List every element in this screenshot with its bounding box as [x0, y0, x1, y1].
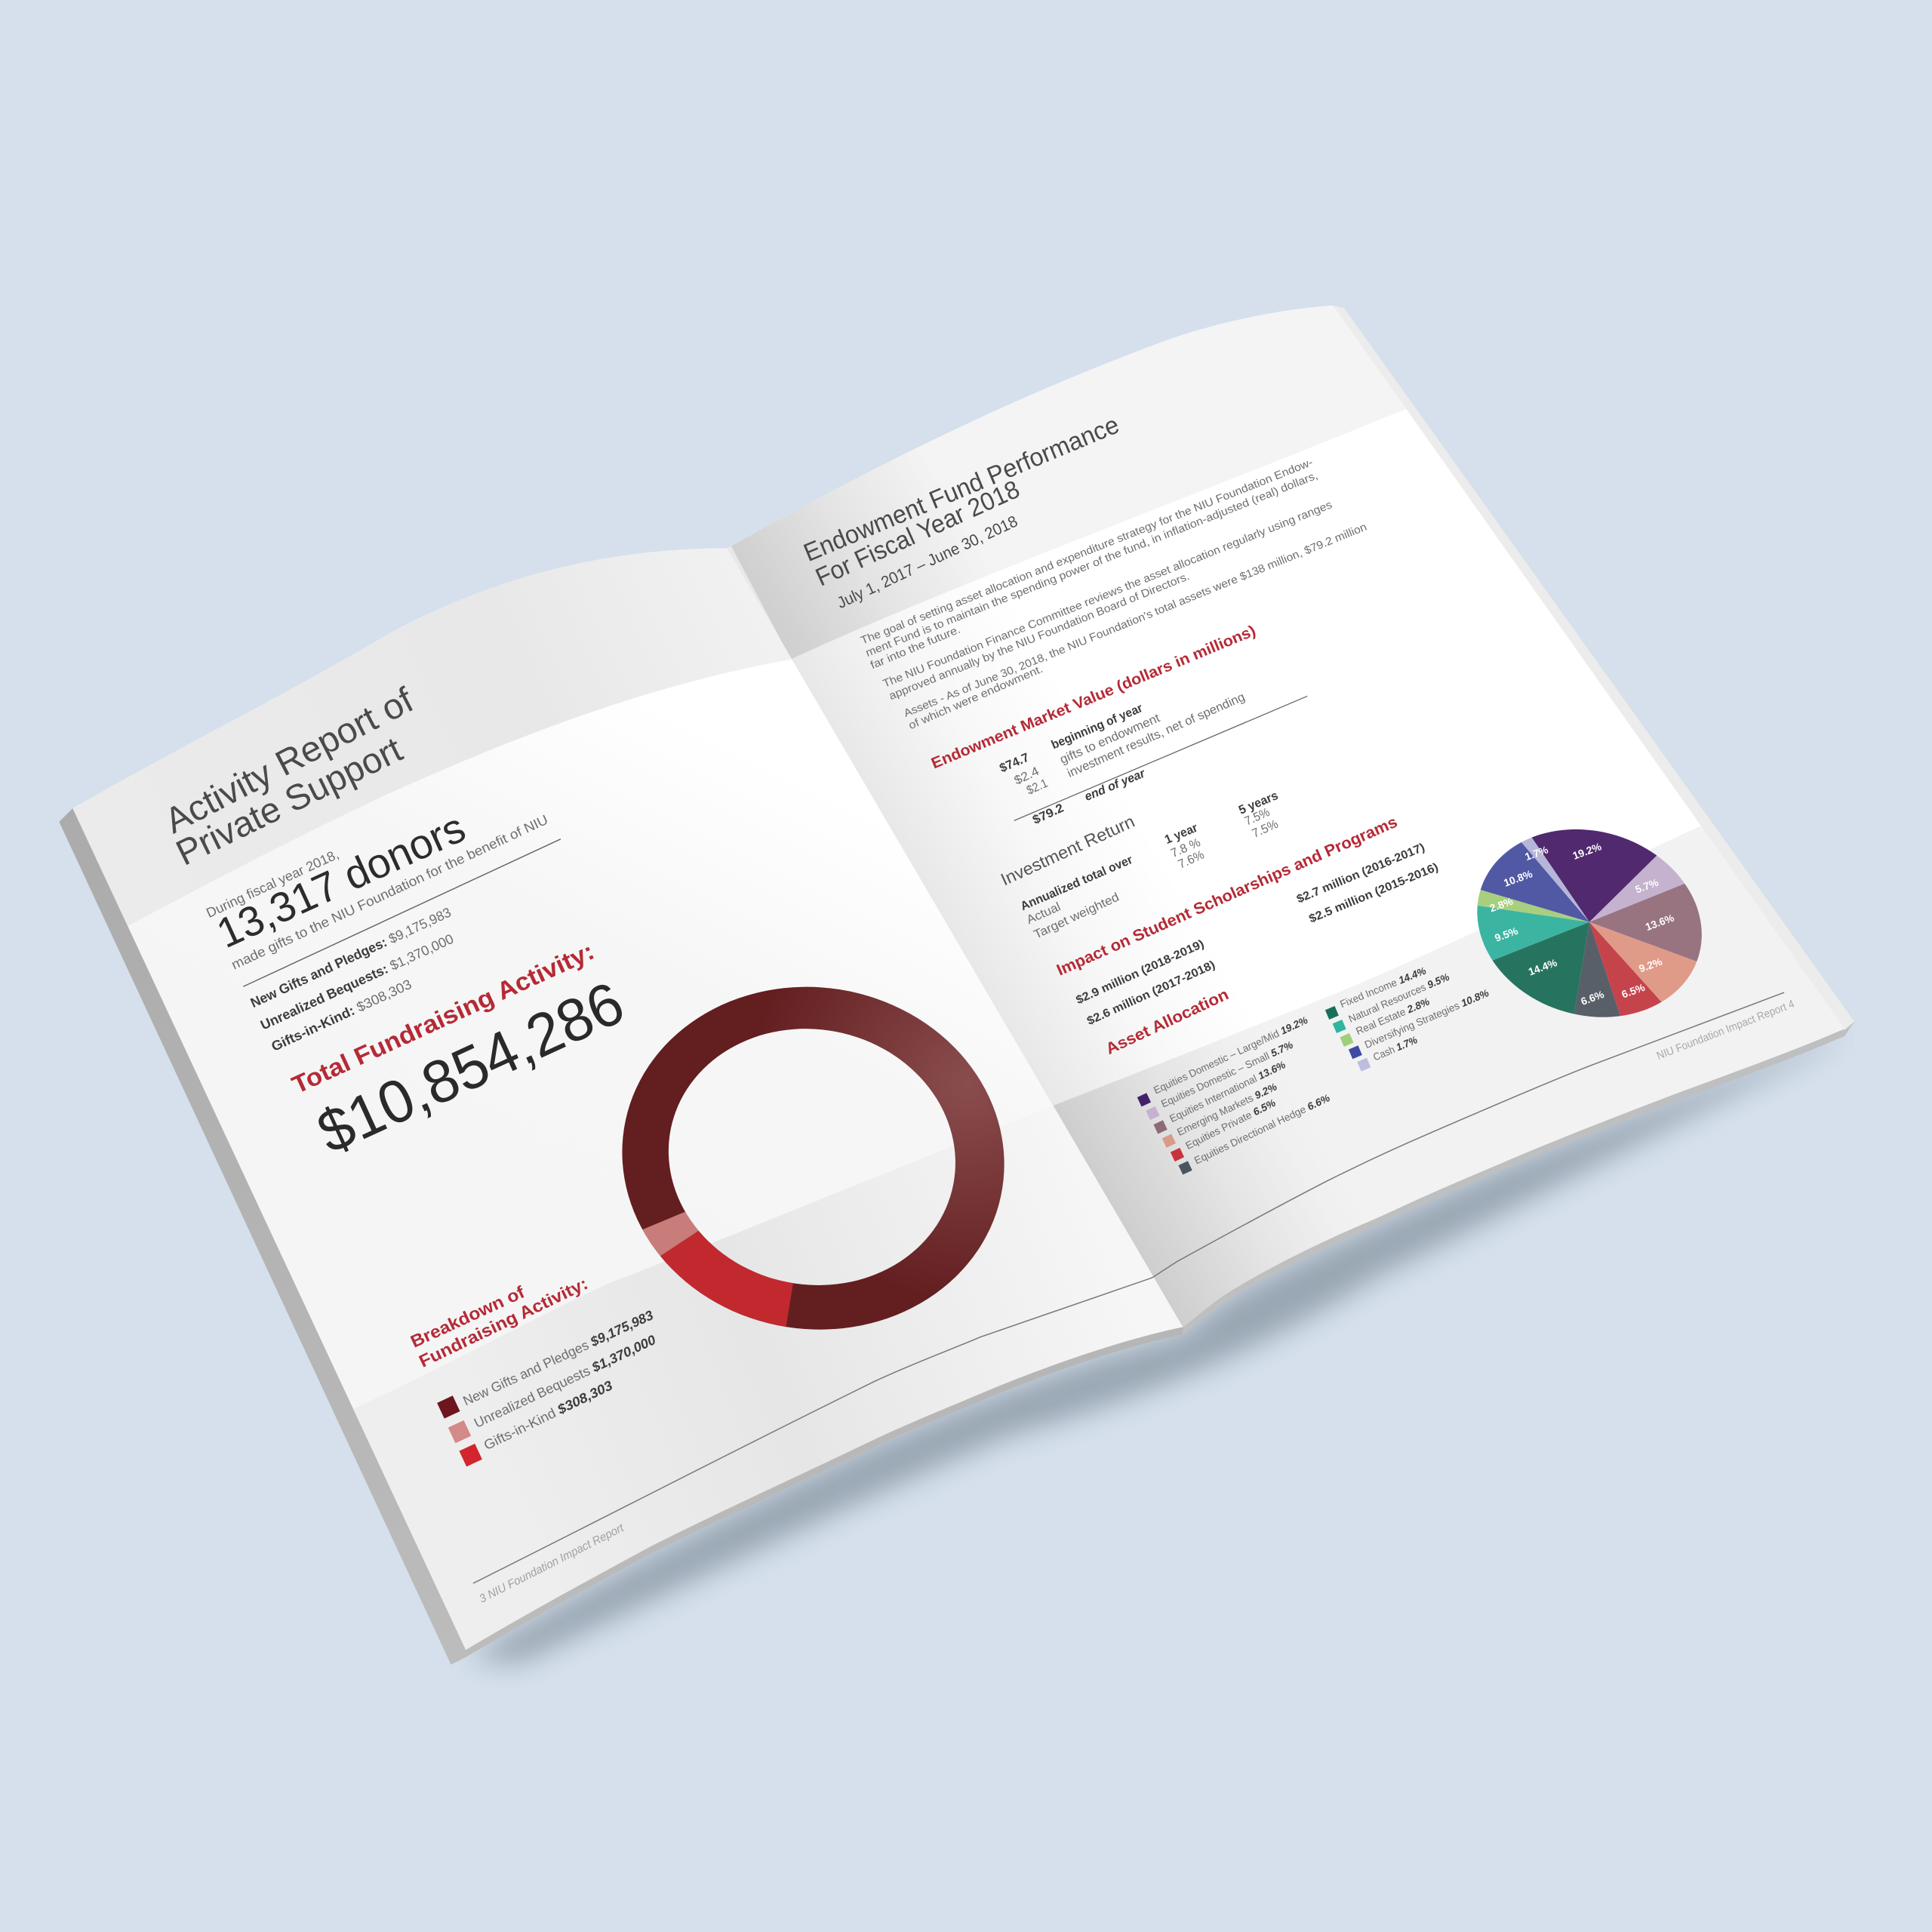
- impact values: $2.5 million (2015-2016): [1307, 861, 1440, 926]
- legend: new gifts: New Gifts and Pledges $9,175,983: [460, 1307, 656, 1408]
- date range: July 1, 2017 – June 30, 2018: [835, 512, 1020, 612]
- bequests: Unrealized Bequests: $1,370,000: [258, 931, 456, 1033]
- labels: Natural Resources 9.5%: [1347, 971, 1451, 1025]
- pie labels: [1488, 840, 1675, 1008]
- heading line 1: Endowment Fund Performance: [800, 411, 1123, 568]
- asset legend column 1: [1137, 1014, 1332, 1175]
- right page stack edge: [1183, 306, 1854, 1334]
- total amount: $10,854,286: [308, 969, 633, 1166]
- paragraph 1: The goal of setting asset allocation and expenditure strategy for the NIU Foundation Endow-: [859, 457, 1315, 648]
- breakdown line 1: Breakdown of: [408, 1281, 528, 1352]
- pie labels: 6.6%: [1579, 988, 1606, 1008]
- paragraph 1: ment Fund is to maintain the spending power of the fund, in inflation-adjusted (real) dollars,: [864, 469, 1319, 660]
- labels: Emerging Markets 9.2%: [1175, 1081, 1278, 1138]
- labels: Equities International 13.6%: [1168, 1059, 1287, 1124]
- legend: in kind: Gifts-in-Kind $308,303: [481, 1378, 615, 1453]
- swatches: [1325, 1006, 1371, 1072]
- heading line 1: Activity Report of: [158, 680, 420, 841]
- labels: Equities Directional Hedge 6.6%: [1192, 1092, 1332, 1167]
- labels: [1152, 1014, 1332, 1167]
- heading line 2: For Fiscal Year 2018: [811, 475, 1024, 592]
- row labels: Annualized total over: [1019, 853, 1135, 913]
- market value heading: Endowment Market Value (dollars in millions): [929, 623, 1258, 772]
- investment return table: 7.6%: [1176, 848, 1206, 872]
- donut: new gifts and pledges: [622, 987, 1004, 1330]
- right page footer: NIU Foundation Impact Report 4: [1655, 998, 1796, 1063]
- pie labels: 19.2%: [1571, 840, 1603, 862]
- pie chart: [1477, 829, 1702, 1017]
- value 79.2: $79.2: [1031, 801, 1066, 827]
- impact values: $2.9 million (2018-2019): [1074, 937, 1206, 1007]
- paragraph 2: approved annually by the NIU Foundation Board of Directors.: [888, 571, 1192, 703]
- intro line: During fiscal year 2018,: [204, 847, 341, 921]
- panel: left page: [72, 548, 1183, 1650]
- donut: unrealized bequests: [643, 1212, 699, 1256]
- donor count: 13,317 donors: [210, 804, 472, 957]
- donor summary: [204, 804, 550, 973]
- investment return table: Actual: [1025, 900, 1063, 927]
- rule: [1014, 696, 1307, 820]
- 5 years: 5 years: [1237, 789, 1280, 817]
- total fundraising: [288, 937, 633, 1166]
- pie labels: 9.2%: [1637, 955, 1663, 974]
- asset allocation heading: Asset Allocation: [1103, 986, 1232, 1058]
- labels: Fixed Income 14.4%: [1338, 965, 1428, 1010]
- labels: Real Estate 2.8%: [1354, 996, 1432, 1037]
- donor caption: made gifts to the NIU Foundation for the benefit of NIU: [229, 812, 550, 973]
- pie labels: 9.5%: [1493, 924, 1519, 944]
- left page stack edge: [59, 549, 1183, 1665]
- market value table: [998, 690, 1307, 827]
- gifts in kind: Gifts-in-Kind: $308,303: [269, 977, 414, 1054]
- panel: right page: [728, 306, 1844, 1327]
- labels: Diversifying Strategies 10.8%: [1363, 987, 1491, 1051]
- pie labels: 2.8%: [1488, 895, 1515, 914]
- labels: Cash 1.7%: [1371, 1034, 1419, 1063]
- value 2.4: $2.4: [1012, 764, 1041, 788]
- left page heading: [158, 680, 420, 874]
- labels: Equities Private 6.5%: [1184, 1097, 1278, 1152]
- pie labels: 10.8%: [1502, 867, 1534, 889]
- 1 year: 1 year: [1163, 820, 1200, 847]
- donut chart: [622, 987, 1004, 1330]
- labels: Equities Domestic – Small 5.7%: [1159, 1039, 1295, 1109]
- pie labels: 6.5%: [1620, 981, 1647, 1001]
- impact values: $2.6 million (2017-2018): [1085, 958, 1217, 1028]
- swatch: bequests: [448, 1420, 471, 1443]
- investment return table: 7.5%: [1243, 805, 1272, 829]
- swatch: new gifts: [437, 1395, 460, 1419]
- investment return table: 7.8 %: [1169, 835, 1202, 860]
- breakdown legend: [437, 1307, 658, 1466]
- label beginning: beginning of year: [1049, 701, 1145, 752]
- pie labels: 5.7%: [1633, 876, 1660, 896]
- right page body: [715, 296, 1860, 1343]
- breakdown heading: [408, 1273, 591, 1371]
- pie slices: [1477, 829, 1702, 1017]
- paragraph 1: far into the future.: [869, 624, 962, 672]
- pie labels: 14.4%: [1527, 956, 1558, 978]
- labels: Equities Domestic – Large/Mid 19.2%: [1152, 1014, 1309, 1097]
- impact section: [1054, 814, 1440, 1028]
- label gifts: gifts to endowment: [1058, 711, 1162, 767]
- investment return table: [998, 789, 1280, 942]
- impact values: $2.7 million (2016-2017): [1295, 841, 1426, 906]
- booklet shadow: [468, 1032, 1844, 1663]
- value 2.1: $2.1: [1025, 777, 1050, 798]
- paragraph 3: Assets - As of June 30, 2018, the NIU Foundation's total assets were $138 million, $79.2 million: [902, 521, 1369, 720]
- gutter shading: [728, 500, 1264, 1327]
- investment return table: Target weighted: [1032, 891, 1121, 942]
- pie labels: 13.6%: [1644, 912, 1675, 933]
- labels: [1338, 965, 1491, 1063]
- swatch: in kind: [459, 1444, 482, 1466]
- total heading: Total Fundraising Activity:: [288, 937, 598, 1099]
- legend: bequests: Unrealized Bequests $1,370,000: [472, 1332, 658, 1431]
- label end: end of year: [1083, 766, 1148, 804]
- left page footer: 3 NIU Foundation Impact Report: [477, 1521, 626, 1606]
- asset legend column 2: [1325, 965, 1491, 1072]
- paragraph 3: of which were endowment.: [907, 663, 1045, 732]
- pie labels: 1.7%: [1523, 843, 1549, 863]
- swatches: [1137, 1093, 1192, 1175]
- donut: gifts in kind: [660, 1230, 793, 1327]
- left page body: [72, 548, 1182, 1650]
- right page heading: [800, 411, 1123, 612]
- gift summary list: [248, 905, 456, 1054]
- breakdown line 2: Fundraising Activity:: [416, 1273, 591, 1371]
- impact heading: Impact on Student Scholarships and Programs: [1054, 814, 1400, 980]
- paragraph 2: The NIU Foundation Finance Committee reviews the asset allocation regularly using ranges: [881, 499, 1334, 691]
- gifts and pledges: New Gifts and Pledges: $9,175,983: [248, 905, 454, 1011]
- value 74.7: $74.7: [998, 751, 1031, 775]
- left page top band: [72, 548, 792, 925]
- impact values: [1074, 841, 1440, 1028]
- label investment: investment results, net of spending: [1065, 690, 1247, 780]
- heading line 2: Private Support: [170, 730, 408, 874]
- right page top band: [731, 306, 1406, 659]
- left page bottom band: [353, 1176, 1182, 1650]
- right page bottom band: [1054, 826, 1844, 1327]
- intro paragraphs: [859, 457, 1369, 732]
- return heading: Investment Return: [998, 811, 1137, 889]
- investment return table: 7.5%: [1250, 817, 1280, 841]
